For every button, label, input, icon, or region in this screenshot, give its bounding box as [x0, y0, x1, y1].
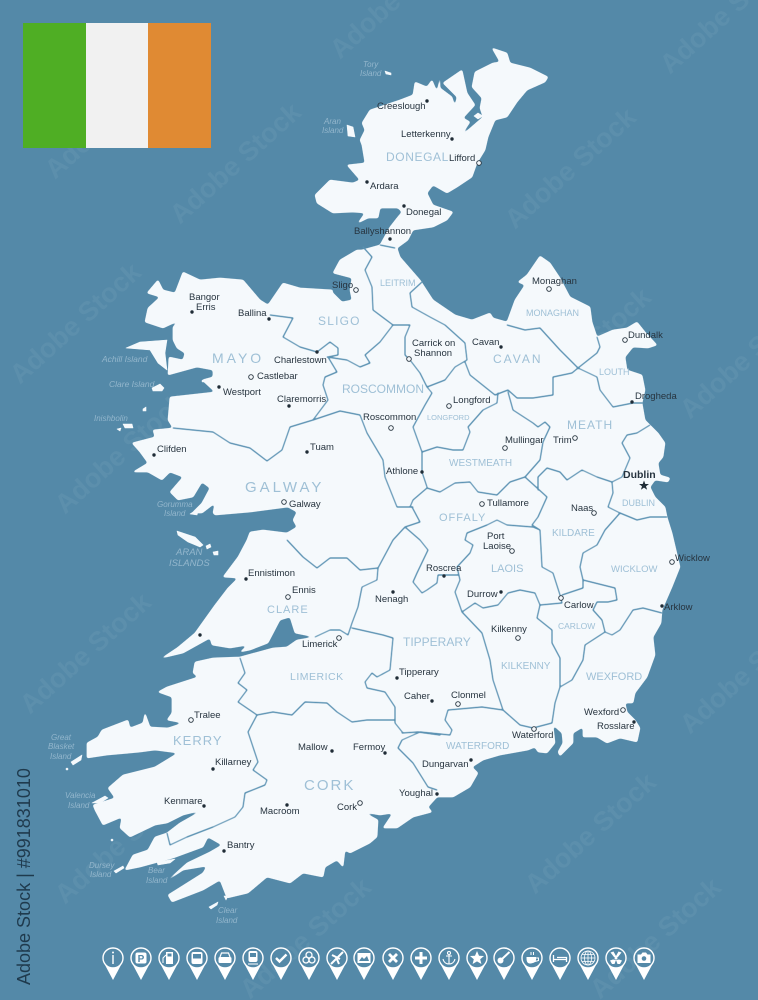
watermark: Adobe Stock [49, 776, 192, 909]
town names: Youghal [399, 788, 433, 799]
sea and island names: Island [68, 801, 90, 810]
town names: Longford [453, 395, 491, 406]
watermark: Adobe Stock [514, 281, 657, 414]
town names: Galway [289, 499, 321, 510]
pin: anchor [439, 948, 459, 980]
pin: parking [131, 948, 151, 980]
town names: Drogheda [635, 391, 677, 402]
town names: Port [487, 531, 505, 542]
county names: WICKLOW [611, 564, 657, 575]
sea and island names: Island [50, 752, 72, 761]
islands [66, 71, 483, 909]
sea and island names: Tory [363, 60, 379, 69]
county names: WEXFORD [586, 671, 642, 683]
town names: Shannon [414, 348, 452, 359]
county names: TIPPERARY [403, 635, 471, 649]
sea and island names: Island [164, 509, 186, 518]
town names: Rosslare [597, 721, 634, 732]
county names: CARLOW [558, 621, 595, 631]
land mass [87, 48, 680, 902]
town names: Nenagh [375, 594, 408, 605]
town names: Dundalk [628, 330, 663, 341]
town names: Durrow [467, 589, 498, 600]
sea and island names: Clear [218, 906, 237, 915]
town names: Tuam [310, 442, 334, 453]
sea and island names: Aran [323, 117, 341, 126]
county names: GALWAY [245, 479, 324, 496]
pin: key [494, 948, 514, 980]
town names: Macroom [260, 806, 300, 817]
pin: car [215, 948, 235, 980]
county names: CAVAN [493, 352, 543, 366]
pin: plane [327, 948, 347, 980]
county names: LIMERICK [290, 671, 344, 683]
town names: Kilkenny [491, 624, 527, 635]
town names: Caher [404, 691, 430, 702]
town names: Bangor [189, 292, 220, 303]
pin: bed [550, 948, 570, 980]
stock credit: Adobe Stock | #991831010 [14, 768, 34, 985]
town names: Roscommon [363, 412, 416, 423]
town names: Mullingar [505, 435, 544, 446]
sea and island names: Valencia [65, 791, 96, 800]
county names: WESTMEATH [449, 458, 512, 469]
town names: Cavan [472, 337, 499, 348]
town names: Cork [337, 802, 357, 813]
map of Ireland [66, 48, 680, 909]
pin: picture [354, 948, 374, 980]
town names: Ennistimon [248, 568, 295, 579]
county names: LONGFORD [427, 413, 470, 422]
town names: Dungarvan [422, 759, 468, 770]
town names: Ballina [238, 308, 267, 319]
county names: LOUTH [599, 367, 630, 377]
county names: SLIGO [318, 314, 361, 328]
county names: DONEGAL [386, 150, 449, 164]
pin: star [467, 948, 487, 980]
watermark: Adobe Stock [4, 256, 147, 389]
county names: OFFALY [439, 512, 486, 524]
town names: Limerick [302, 639, 338, 650]
county names: CORK [304, 777, 355, 794]
sea and island names: Bear [148, 866, 165, 875]
town names: Tipperary [399, 667, 439, 678]
town names: Laoise [483, 541, 511, 552]
county names: WATERFORD [446, 741, 509, 752]
pin: parking: P [138, 954, 145, 965]
county borders [167, 245, 667, 845]
town names: Tullamore [487, 498, 529, 509]
sea and island names: Island [146, 876, 168, 885]
sea and island names: Island [216, 916, 238, 925]
county names: KERRY [173, 733, 223, 748]
pin: plus [411, 948, 431, 980]
watermark: Adobe Stock [499, 101, 642, 234]
town names: Naas [571, 503, 593, 514]
capital star: Dublin [639, 480, 649, 490]
watermark: Adobe Stock [164, 96, 307, 229]
pin: cross [383, 948, 403, 980]
sea and island names: ARAN [175, 547, 203, 558]
town names: Erris [196, 302, 216, 313]
town names: Bantry [227, 840, 255, 851]
town markers: filled dots [152, 99, 664, 853]
pin: info [103, 948, 123, 980]
watermark: Adobe Stock [519, 766, 662, 899]
pin: fuel [159, 948, 179, 980]
town names: Fermoy [353, 742, 385, 753]
town names: Castlebar [257, 371, 298, 382]
pin: biohazard [299, 948, 319, 980]
town names: Roscrea [426, 563, 462, 574]
county names: MEATH [567, 418, 613, 432]
county names: DUBLIN [622, 498, 655, 508]
town names: Letterkenny [401, 129, 451, 140]
county names [173, 150, 657, 794]
town names: Athlone [386, 466, 418, 477]
town names: Clonmel [451, 690, 486, 701]
town names: Ballyshannon [354, 226, 411, 237]
town names [157, 101, 710, 851]
town names: Wicklow [675, 553, 710, 564]
sea and island names [48, 60, 382, 925]
sea and island names: Inishbolin [94, 414, 128, 423]
town names: Claremorris [277, 394, 326, 405]
town names: Monaghan [532, 276, 577, 287]
map pin icons row [103, 948, 654, 980]
pin: camera [634, 948, 654, 980]
town names: Donegal [406, 207, 441, 218]
sea and island names: Island [322, 126, 344, 135]
county names: MAYO [212, 350, 264, 366]
sea and island names: ISLANDS [169, 558, 210, 569]
pin: train [243, 948, 263, 980]
town names: Kenmare [164, 796, 203, 807]
town names: Waterford [512, 730, 553, 741]
county names: LEITRIM [380, 278, 416, 288]
town names: Carlow [564, 600, 594, 611]
county names: ROSCOMMON [342, 382, 424, 396]
town names: Lifford [449, 153, 475, 164]
flag of Ireland [23, 23, 211, 148]
town names: Charlestown [274, 355, 327, 366]
sea and island names: Dursey [89, 861, 115, 870]
sea and island names: Island [90, 870, 112, 879]
town names: Mallow [298, 742, 328, 753]
town names: Dublin [623, 469, 656, 481]
town names: Ardara [370, 181, 399, 192]
county names: LAOIS [491, 563, 523, 575]
town names: Carrick on [412, 338, 455, 349]
pin: coffee [522, 948, 542, 980]
town names: Creeslough [377, 101, 426, 112]
county names: KILKENNY [501, 661, 551, 672]
town markers: open rings [189, 161, 674, 805]
sea and island names: Blasket [48, 742, 75, 751]
county names: KILDARE [552, 528, 595, 539]
watermark: Adobe Stock [39, 51, 182, 184]
town names: Clifden [157, 444, 187, 455]
sea and island names: Achill Island [101, 354, 148, 364]
county names: MONAGHAN [526, 308, 579, 318]
town names: Trim [553, 435, 572, 446]
town names: Ennis [292, 585, 316, 596]
sea and island names: Gorumma [157, 500, 193, 509]
pin: check [271, 948, 291, 980]
town names: Sligo [332, 280, 353, 291]
sea and island names: Clare Island [109, 379, 155, 389]
town names: Tralee [194, 710, 221, 721]
pin: globe [578, 948, 598, 980]
watermark: Adobe Stock [14, 586, 157, 719]
county names: CLARE [267, 604, 309, 616]
town names: Westport [223, 387, 261, 398]
town names: Arklow [664, 602, 693, 613]
sea and island names: Great [51, 733, 72, 742]
pin: bus [187, 948, 207, 980]
town names: Killarney [215, 757, 252, 768]
sea and island names: Island [360, 69, 382, 78]
town names: Wexford [584, 707, 619, 718]
watermark: Adobe Stock [49, 386, 192, 519]
pin: radiation [606, 948, 626, 980]
